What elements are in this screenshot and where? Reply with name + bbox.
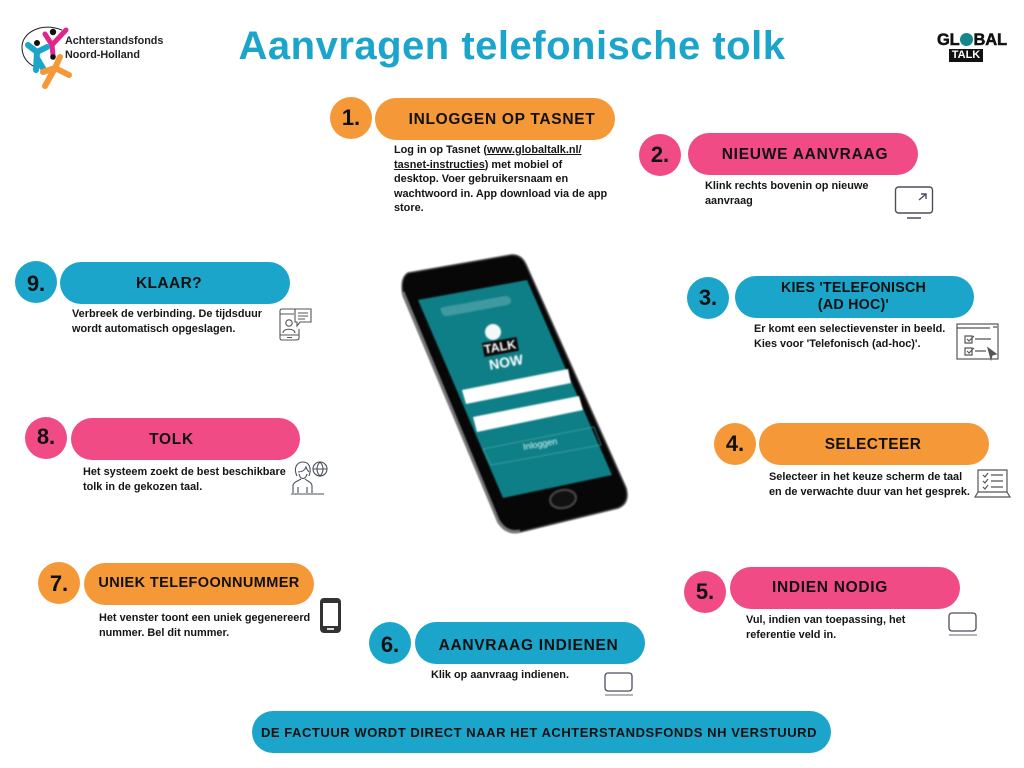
icon: phone with chat: [279, 308, 312, 340]
text: step 3: Er komt een selectievenster in beeld.: [754, 323, 945, 335]
icon: checklist window: [956, 323, 999, 362]
logo: Global Talk: TALK: [952, 49, 980, 61]
text: step 8: Het systeem zoekt de best beschikbare: [83, 466, 286, 478]
text: step 4: en de verwachte duur van het gesprek.: [769, 486, 970, 498]
heading: nieuwe aanvraag: NIEUWE AANVRAAG: [722, 146, 888, 162]
phone photo: [400, 253, 629, 534]
heading: klaar: [60, 262, 290, 304]
title: Aanvragen telefonische tolk: [238, 24, 785, 68]
text: step 3: [754, 323, 945, 350]
step 8: [25, 417, 328, 494]
logo: Achterstandsfonds Noord-Holland: [22, 26, 163, 89]
number 7: 7.: [50, 570, 68, 596]
heading: aanvraag indienen: [415, 622, 645, 664]
step 3: [687, 276, 999, 362]
step 5: [684, 567, 977, 640]
text: step 9: Verbreek de verbinding. De tijdsduur: [72, 308, 262, 320]
number 3: [687, 277, 729, 319]
text: step 4: Selecteer in het keuze scherm de taal: [769, 471, 962, 483]
banner: factuur: DE FACTUUR WORDT DIRECT NAAR HET ACHTERSTANDSFONDS NH VERSTUURD: [261, 724, 817, 740]
text: step 2: [705, 180, 868, 206]
icon: laptop checklist: [974, 469, 1011, 498]
number 3: 3.: [699, 285, 717, 310]
icon: laptop: [604, 672, 633, 696]
phone screen: [418, 280, 612, 498]
text: step 5: [746, 614, 906, 640]
text: step 1: store.: [394, 202, 424, 214]
text: step 9: [72, 308, 262, 334]
text: step 6: Klik op aanvraag indienen.: [431, 669, 569, 681]
step 4: [714, 423, 1011, 498]
text: step 8: [83, 466, 286, 492]
step 1: [330, 97, 615, 214]
logo: Achterstandsfonds Noord-Holland: Achterstandsfonds: [65, 35, 163, 47]
text: step 1: tasnet-instructies) met mobiel of: [394, 158, 562, 170]
text: step 8: tolk in de gekozen taal.: [83, 480, 202, 492]
number 9: 9.: [27, 270, 45, 296]
heading: inloggen op tasnet: INLOGGEN OP TASNET: [409, 110, 595, 128]
text: step 1: Log in op Tasnet (www.globaltalk.nl/: [394, 144, 582, 156]
number 2: 2.: [651, 142, 669, 167]
heading: tolk: TOLK: [149, 430, 194, 448]
number 6: [369, 622, 411, 664]
text: step 9: wordt automatisch opgeslagen.: [72, 322, 235, 334]
phone body: [402, 255, 627, 533]
text: step 5: Vul, indien van toepassing, het: [746, 614, 905, 626]
banner: factuur: [252, 711, 831, 753]
text: step 2: Klink rechts bovenin op nieuwe: [705, 180, 868, 192]
number 2: [639, 134, 681, 176]
logo: Achterstandsfonds Noord-Holland: Noord-Holland: [65, 48, 140, 60]
number 5: [684, 571, 726, 613]
text: step 7: [99, 612, 310, 638]
heading: klaar: KLAAR?: [136, 274, 202, 292]
number 8: 8.: [37, 424, 55, 448]
step 9: [15, 261, 312, 340]
number 1: [330, 97, 372, 139]
heading: uniek telefoonnummer: UNIEK TELEFOONNUMMER: [98, 574, 300, 590]
icon: laptop: [948, 612, 977, 636]
phone screen: TALK: [483, 337, 517, 357]
heading: indien nodig: [730, 567, 960, 609]
icon: monitor: [894, 186, 934, 219]
text: step 1: desktop. Voer gebruikersnaam en: [394, 173, 568, 185]
text: step 5: referentie veld in.: [746, 628, 836, 640]
heading: nieuwe aanvraag: [688, 133, 918, 175]
text: step 3: Kies voor 'Telefonisch (ad-hoc)'.: [754, 338, 921, 350]
text: step 7: Het venster toont een uniek gegenereerd: [99, 612, 310, 624]
text: step 7: nummer. Bel dit nummer.: [99, 626, 229, 638]
text: step 1: [394, 144, 607, 214]
phone screen: NOW: [488, 351, 525, 373]
icon: interpreter with globe: [291, 462, 328, 494]
number 9: [15, 261, 57, 303]
number 8: [25, 417, 67, 459]
phone screen: Inloggen: [522, 436, 558, 452]
heading: selecteer: [759, 423, 989, 465]
number 1: 1.: [342, 105, 360, 130]
text: step 2: aanvraag: [705, 194, 753, 206]
heading: aanvraag indienen: AANVRAAG INDIENEN: [439, 636, 618, 654]
heading: uniek telefoonnummer: [84, 563, 314, 605]
heading: inloggen op tasnet: [375, 98, 615, 140]
heading: kies telefonisch: [735, 276, 974, 318]
icon: smartphone: [320, 598, 341, 633]
number 6: 6.: [381, 632, 399, 656]
heading: indien nodig: INDIEN NODIG: [772, 578, 888, 596]
heading: kies telefonisch: (AD HOC)': [818, 297, 889, 313]
text: step 1: wachtwoord in. App download via de app: [394, 188, 607, 200]
logo: Global Talk: [937, 31, 1007, 62]
number 4: 4.: [726, 431, 744, 456]
heading: tolk: [71, 418, 300, 460]
number 5: 5.: [696, 579, 714, 604]
number 4: [714, 423, 756, 465]
heading: selecteer: SELECTEER: [825, 436, 921, 452]
text: step 4: [769, 471, 970, 498]
home button: [549, 488, 577, 510]
step 7: [38, 562, 341, 638]
logo: Global Talk: GL BAL: [937, 31, 1007, 49]
heading: kies telefonisch: KIES 'TELEFONISCH: [781, 280, 926, 296]
number 7: [38, 562, 80, 604]
step 2: [639, 133, 934, 219]
step 6: [369, 622, 645, 696]
